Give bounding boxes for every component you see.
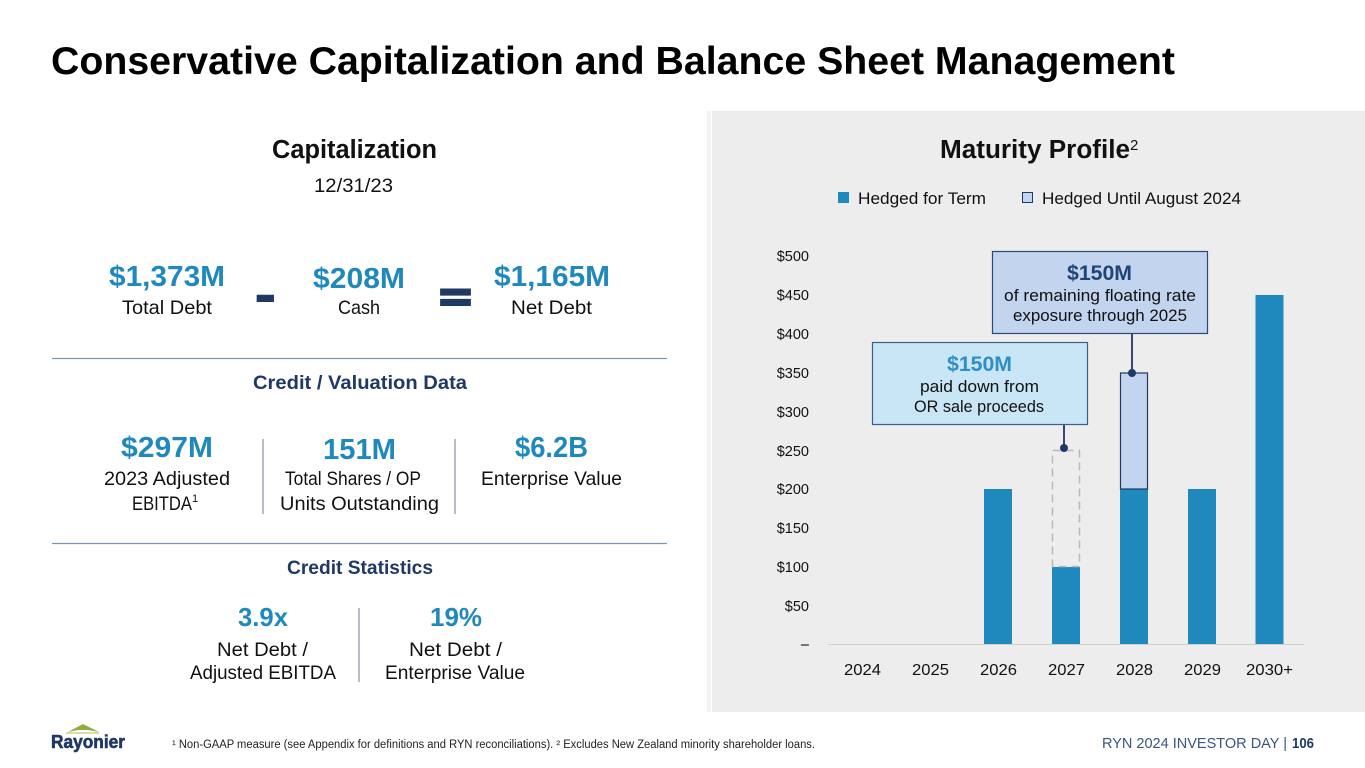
callout: floating rate: $150M [1067,261,1132,285]
metric: net debt: $1,165M [494,261,610,293]
metric: net debt [494,261,610,319]
x axis labels: 2030+ [1246,662,1293,679]
heading: credit valuation data: Credit / Valuation Data [253,373,467,394]
logo: Rayonier: Rayonier [51,732,125,752]
heading: maturity profile: Maturity Profile [940,136,1130,164]
metric: net debt to enterprise value: Enterprise Value [385,662,525,684]
panel: maturity profile [707,111,1365,712]
metric: cash [313,263,405,319]
metric: net debt to enterprise value [385,602,525,684]
y axis labels [777,249,810,653]
metric: enterprise value: $6.2B [515,432,588,464]
metric: adjusted EBITDA [104,432,230,515]
callout: paid down [872,342,1088,452]
metric: shares outstanding: Total Shares / OP [285,468,421,490]
y axis labels: $250 [777,444,809,460]
metric: net debt to EBITDA: Net Debt / [217,639,309,661]
metric: shares outstanding [280,434,439,515]
y axis labels: $50 [785,599,809,615]
metric: adjusted EBITDA: $297M [121,432,213,464]
legend: Hedged Until August 2024 [1042,189,1241,208]
x axis labels [844,662,1293,679]
equals sign: = [440,277,471,319]
y axis labels: $150 [777,521,809,537]
metric: net debt to EBITDA: 3.9x [238,602,289,632]
x axis labels: 2025 [912,662,949,679]
metric: net debt to EBITDA: Adjusted EBITDA [190,662,336,684]
y axis labels: $500 [777,249,809,265]
minus sign: - [254,260,277,327]
metric: shares outstanding: 151M [323,434,396,466]
footnote: ¹ Non-GAAP measure (see Appendix for definitions and RYN reconciliations). ² Excludes New Zealand minority shareholder loans. [172,739,815,751]
metric: net debt to enterprise value: 19% [430,602,482,632]
legend [838,189,1241,208]
heading: maturity profile: 2 [1130,137,1138,154]
metric: total debt: Total Debt [122,297,213,319]
metric: cash: $208M [313,263,405,295]
legend: Hedged for Term [858,189,986,208]
panel: capitalization [109,136,610,327]
panel: credit statistics [190,558,525,684]
x axis labels: 2024 [844,662,881,679]
callout: paid down: paid down from [920,377,1039,396]
callout: floating rate: of remaining floating rate [1004,286,1196,305]
metric: shares outstanding: Units Outstanding [280,493,439,515]
bar chart [828,295,1304,644]
callout: floating rate: exposure through 2025 [1013,306,1187,325]
metric: enterprise value: Enterprise Value [481,468,622,490]
heading: credit statistics: Credit Statistics [287,558,433,579]
y axis labels: $100 [777,560,809,576]
metric: adjusted EBITDA: 1 [192,493,198,505]
x axis labels: 2026 [980,662,1017,679]
date: 12/31/23 [314,175,393,197]
x axis labels: 2029 [1184,662,1221,679]
footer: event and page number: RYN 2024 INVESTOR DAY | [1102,735,1287,752]
y axis labels: $200 [777,482,809,498]
metric: total debt: $1,373M [109,261,225,293]
title: Conservative Capitalization and Balance Sheet Management [51,40,1175,83]
metric: total debt [109,261,225,319]
panel: credit valuation data [104,373,622,515]
y axis labels: $450 [777,288,809,304]
callout: paid down: $150M [947,352,1012,376]
x axis labels: 2027 [1048,662,1085,679]
metric: net debt to enterprise value: Net Debt / [409,639,503,661]
callout: paid down: OR sale proceeds [914,397,1044,416]
metric: adjusted EBITDA: EBITDA [132,493,192,515]
y axis labels: $300 [777,405,809,421]
heading: capitalization: Capitalization [272,136,437,164]
x axis labels: 2028 [1116,662,1153,679]
metric: net debt: Net Debt [511,297,593,319]
y axis labels: – [801,637,810,653]
metric: adjusted EBITDA: 2023 Adjusted [104,468,230,490]
callout: floating rate [992,252,1208,377]
metric: net debt to EBITDA [190,602,336,684]
y axis labels: $400 [777,327,809,343]
metric: enterprise value [481,432,622,490]
y axis labels: $350 [777,366,809,382]
logo: Rayonier [51,724,125,752]
metric: cash: Cash [338,297,380,319]
footer: event and page number: 106 [1292,735,1314,752]
